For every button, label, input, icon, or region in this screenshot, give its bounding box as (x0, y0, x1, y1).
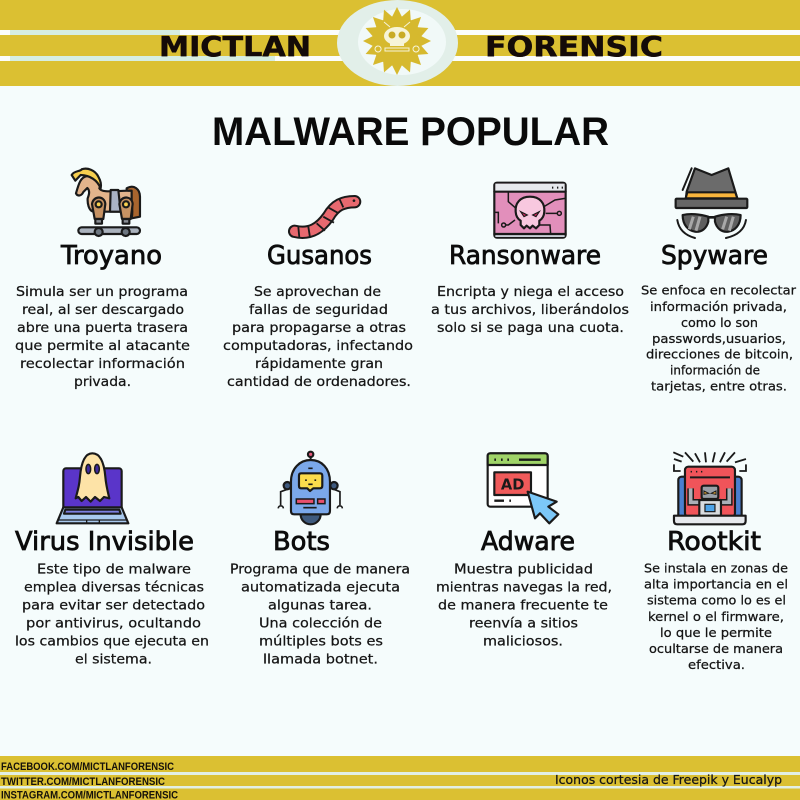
social links: FACEBOOK.COM/MICTLANFORENSIC (1, 761, 174, 773)
text block (436, 562, 612, 650)
text block: Se instala en zonas de (644, 560, 788, 576)
text block: privada. (74, 374, 131, 390)
brand name right: FORENSIC (485, 30, 663, 63)
footer band (0, 756, 800, 800)
logo: sun skull emblem (337, 0, 458, 86)
text block: que permite al atacante (15, 338, 190, 354)
text block: fallas de seguridad (249, 302, 388, 318)
icon credits: Iconos cortesia de Freepik y Eucalyp (555, 772, 782, 787)
text block: mientras navegas la red, (436, 580, 612, 596)
icon: robot on laptop (673, 452, 746, 524)
text block: ocultarse de manera (649, 641, 783, 656)
text block: de manera frecuente te (438, 598, 608, 614)
heading: Spyware (661, 241, 768, 271)
panel: adware (436, 453, 612, 650)
text block: rápidamente gran (255, 356, 383, 372)
text block (223, 284, 413, 390)
text block: passwords,usuarios, (652, 331, 786, 346)
text block: el sistema. (75, 652, 152, 668)
heading: Bots (273, 527, 330, 557)
text block (431, 284, 629, 336)
heading: Rootkit (667, 527, 761, 557)
text block: Simula ser un programa (16, 284, 188, 300)
text block: Este tipo de malware (37, 562, 191, 578)
icon: ghost on laptop (57, 453, 128, 524)
text block: tarjetas, entre otras. (651, 378, 787, 394)
panel: virus invisible (15, 453, 209, 668)
text block: recolectar información (20, 356, 185, 372)
heading: Ransonware (449, 241, 601, 271)
text block: emplea diversas técnicas (24, 580, 204, 596)
text block (230, 562, 410, 668)
text block (15, 562, 209, 668)
text block: para propagarse a otras (232, 320, 406, 336)
text block: Una colección de (259, 616, 382, 632)
panel: bots (230, 452, 410, 668)
text block (641, 282, 797, 394)
text block: solo si se paga una cuota. (437, 320, 624, 336)
icon: ad window and cursor: AD (501, 476, 524, 493)
text block: sistema como lo es el (647, 592, 786, 608)
text block (15, 284, 190, 390)
text block: maliciosos. (483, 634, 563, 650)
icon: spy hat and glasses (676, 168, 747, 238)
text block: cantidad de ordenadores. (227, 374, 411, 390)
text block: computadoras, infectando (223, 338, 413, 354)
icon: worm (295, 199, 355, 237)
heading: Virus Invisible (15, 527, 194, 557)
brand name left: MICTLAN (159, 30, 311, 63)
panel: spyware (641, 168, 797, 394)
text block: reenvía a sitios (469, 616, 578, 632)
text block: algunas tarea. (268, 598, 372, 614)
text block: Encripta y niega el acceso (437, 284, 624, 300)
heading: Adware (481, 527, 575, 557)
heading: Gusanos (267, 241, 372, 271)
text block: por antivirus, ocultando (26, 616, 201, 632)
panel: gusanos (223, 199, 413, 390)
header band (0, 0, 800, 86)
heading: Troyano (60, 241, 162, 271)
text block: información de (670, 362, 760, 378)
text block: Se aprovechan de (254, 284, 381, 300)
text block: múltiples bots es (259, 634, 383, 650)
text block: información privada, (650, 299, 787, 314)
social links: TWITTER.COM/MICTLANFORENSIC (1, 776, 165, 788)
text block: kernel o el firmware, (648, 609, 784, 624)
text block: a tus archivos, liberándolos (431, 302, 629, 318)
text block: llamada botnet. (263, 652, 378, 668)
text block: automatizada ejecuta (241, 580, 400, 596)
text block: para evitar ser detectado (22, 598, 205, 614)
icon: ad window and cursor (488, 453, 558, 523)
title: MALWARE POPULAR (212, 110, 609, 154)
text block: alta importancia en el (644, 576, 788, 592)
panel: rootkit (644, 452, 788, 672)
icon: robot (278, 452, 342, 524)
text block: los cambios que ejecuta en (15, 634, 209, 650)
text block: Programa que de manera (230, 562, 410, 578)
icon: skull browser window (494, 183, 566, 238)
panel: troyano (15, 169, 190, 390)
social links (1, 761, 178, 800)
text block: direcciones de bitcoin, (646, 346, 793, 362)
text block: abre una puerta trasera (17, 320, 188, 336)
text block: como lo son (681, 315, 758, 330)
text block: lo que le permite (660, 625, 772, 640)
panel: ransonware (431, 183, 629, 336)
text block: real, al ser descargado (22, 302, 184, 318)
text block: Se enfoca en recolectar (641, 282, 797, 298)
icon: trojan horse (72, 169, 140, 236)
text block (644, 560, 788, 672)
text block: efectiva. (688, 657, 745, 672)
text block: Muestra publicidad (454, 562, 593, 578)
